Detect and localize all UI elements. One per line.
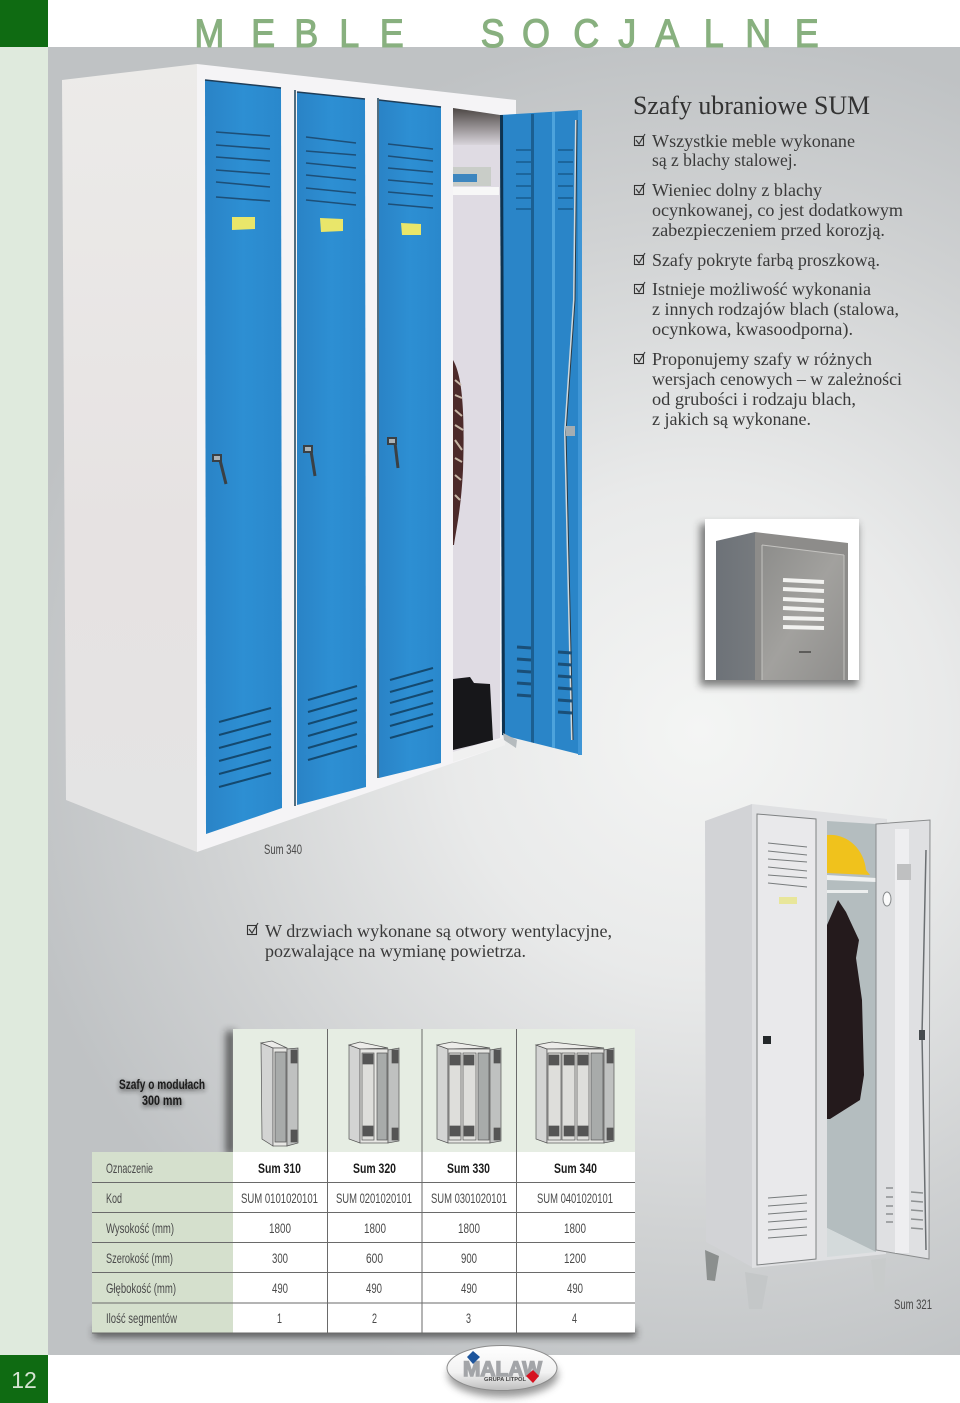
row: Szerokość: Szerokość (mm) (106, 1250, 173, 1266)
open door (500, 110, 582, 755)
feature list: z jakich są wykonane. (652, 409, 811, 429)
feature list: zabezpieczeniem przed korozją. (652, 220, 885, 240)
logo: Malaw (447, 1346, 558, 1397)
logo: Malaw: MALAW (463, 1358, 542, 1381)
thumbnail: Sum 310 (261, 1041, 298, 1146)
thumbnail: Sum 340 (536, 1042, 614, 1143)
row: Kod: SUM 0301020101 (431, 1190, 507, 1206)
row: Szerokość: 600 (366, 1250, 383, 1266)
table grid lines (92, 1029, 635, 1333)
row: Szerokość (106, 1250, 586, 1266)
feature list: Szafy pokryte farbą proszkową. (652, 250, 880, 270)
interior with helmet, shelf and coat (827, 821, 876, 1257)
row: Kod: SUM 0401020101 (537, 1190, 613, 1206)
note: ventilation openings (248, 921, 612, 961)
row: Kod: SUM 0201020101 (336, 1190, 412, 1206)
row: Szerokość: 900 (461, 1250, 477, 1266)
row: Oznaczenie: Sum 310 (258, 1160, 301, 1176)
note: ventilation openings: W drzwiach wykonane są otwory wentylacyjne, (265, 921, 612, 941)
checkbox icon (248, 923, 258, 934)
table body (92, 1152, 233, 1333)
thumbnail header band (233, 1029, 635, 1152)
thumbnail: Sum 330 (437, 1042, 501, 1143)
feature list: Wieniec dolny z blachy (652, 180, 822, 200)
page number tab (0, 1355, 48, 1403)
note: ventilation openings: pozwalające na wymianę powietrza. (265, 941, 526, 961)
row: Oznaczenie (106, 1160, 597, 1176)
row: Ilość segmentów: Ilość segmentów (106, 1310, 178, 1326)
table heading: Szafy o modułach 300 mm: Szafy o modułach (119, 1078, 205, 1094)
row: Oznaczenie: Sum 320 (353, 1160, 396, 1176)
feature list: ocynkowanej, co jest dodatkowym (652, 200, 903, 220)
row: Kod: Kod (106, 1190, 122, 1206)
feature list: Wszystkie meble wykonane (652, 131, 855, 151)
photo: steel locker detail (700, 519, 859, 686)
open door (876, 820, 930, 1259)
locker side panel (62, 64, 197, 852)
cabinet front frame (752, 804, 887, 1268)
caption: Sum 321: Sum 321 (894, 1296, 932, 1312)
open compartment (453, 108, 505, 762)
feature list: od grubości i rodzaju blach, (652, 389, 856, 409)
feature list: z innych rodzajów blach (stalowa, (652, 299, 899, 319)
row: Ilość segmentów (106, 1310, 577, 1326)
photo: grey Sum 321 locker (705, 804, 930, 1309)
row: Głębokość: 490 (366, 1280, 382, 1296)
cabinet side (705, 804, 752, 1267)
caption: Sum 340: Sum 340 (264, 841, 302, 857)
row: Wysokość: 1800 (564, 1220, 586, 1236)
row: Oznaczenie: Oznaczenie (106, 1160, 153, 1176)
row: Głębokość: Głębokość (mm) (106, 1280, 176, 1296)
door 2 (294, 90, 366, 806)
checkbox icons (634, 134, 645, 364)
heading: Szafy ubraniowe SUM: Szafy ubraniowe SUM (633, 91, 870, 120)
row: Ilość segmentów: 3 (466, 1310, 471, 1326)
row: Głębokość: 490 (272, 1280, 288, 1296)
door 3 (377, 98, 441, 778)
row: Wysokość: 1800 (458, 1220, 480, 1236)
feature list (634, 131, 903, 429)
row: Wysokość: Wysokość (mm) (106, 1220, 174, 1236)
row: Głębokość: 490 (567, 1280, 583, 1296)
logo: Malaw: GRUPA LITPOL (484, 1377, 526, 1383)
page number tab: 12 (11, 1367, 37, 1393)
row: Ilość segmentów: 1 (277, 1310, 282, 1326)
row: Wysokość: 1800 (269, 1220, 291, 1236)
row: Oznaczenie: Sum 330 (447, 1160, 490, 1176)
row: Ilość segmentów: 2 (372, 1310, 377, 1326)
row: Ilość segmentów: 4 (572, 1310, 577, 1326)
closed door (757, 814, 816, 1265)
feature list: ocynkowa, kwasoodporna). (652, 319, 853, 339)
row: Oznaczenie: Sum 340 (554, 1160, 597, 1176)
row: Głębokość: 490 (461, 1280, 477, 1296)
row: Wysokość: 1800 (364, 1220, 386, 1236)
row: Wysokość (106, 1220, 586, 1236)
specification table (92, 1029, 636, 1337)
feature list: wersjach cenowych – w zależności (652, 369, 902, 389)
table heading: Szafy o modułach 300 mm: Szafy o modułach (119, 1076, 205, 1092)
table heading: Szafy o modułach 300 mm (119, 1076, 205, 1110)
corner tab: top green square (0, 0, 48, 47)
feature list: są z blachy stalowej. (652, 150, 797, 170)
photo: blue Sum 340 locker (62, 64, 582, 852)
feature list: Proponujemy szafy w różnych (652, 349, 872, 369)
title: MEBLESOCJALNE (194, 12, 819, 56)
row: Kod: SUM 0101020101 (241, 1190, 318, 1206)
table shadows (94, 1031, 636, 1337)
locker front frame (197, 64, 516, 852)
table heading: Szafy o modułach 300 mm: 300 mm (142, 1092, 182, 1108)
row: Szerokość: 300 (272, 1250, 288, 1266)
feature list: Istnieje możliwość wykonania (652, 279, 871, 299)
rear and front feet (705, 1250, 886, 1309)
thumbnail: Sum 320 (349, 1042, 399, 1143)
row: Głębokość (106, 1280, 583, 1296)
door 1 (205, 80, 282, 834)
table heading: Szafy o modułach 300 mm: 300 mm (142, 1094, 182, 1110)
row: Szerokość: 1200 (564, 1250, 586, 1266)
row: Kod (106, 1190, 613, 1206)
